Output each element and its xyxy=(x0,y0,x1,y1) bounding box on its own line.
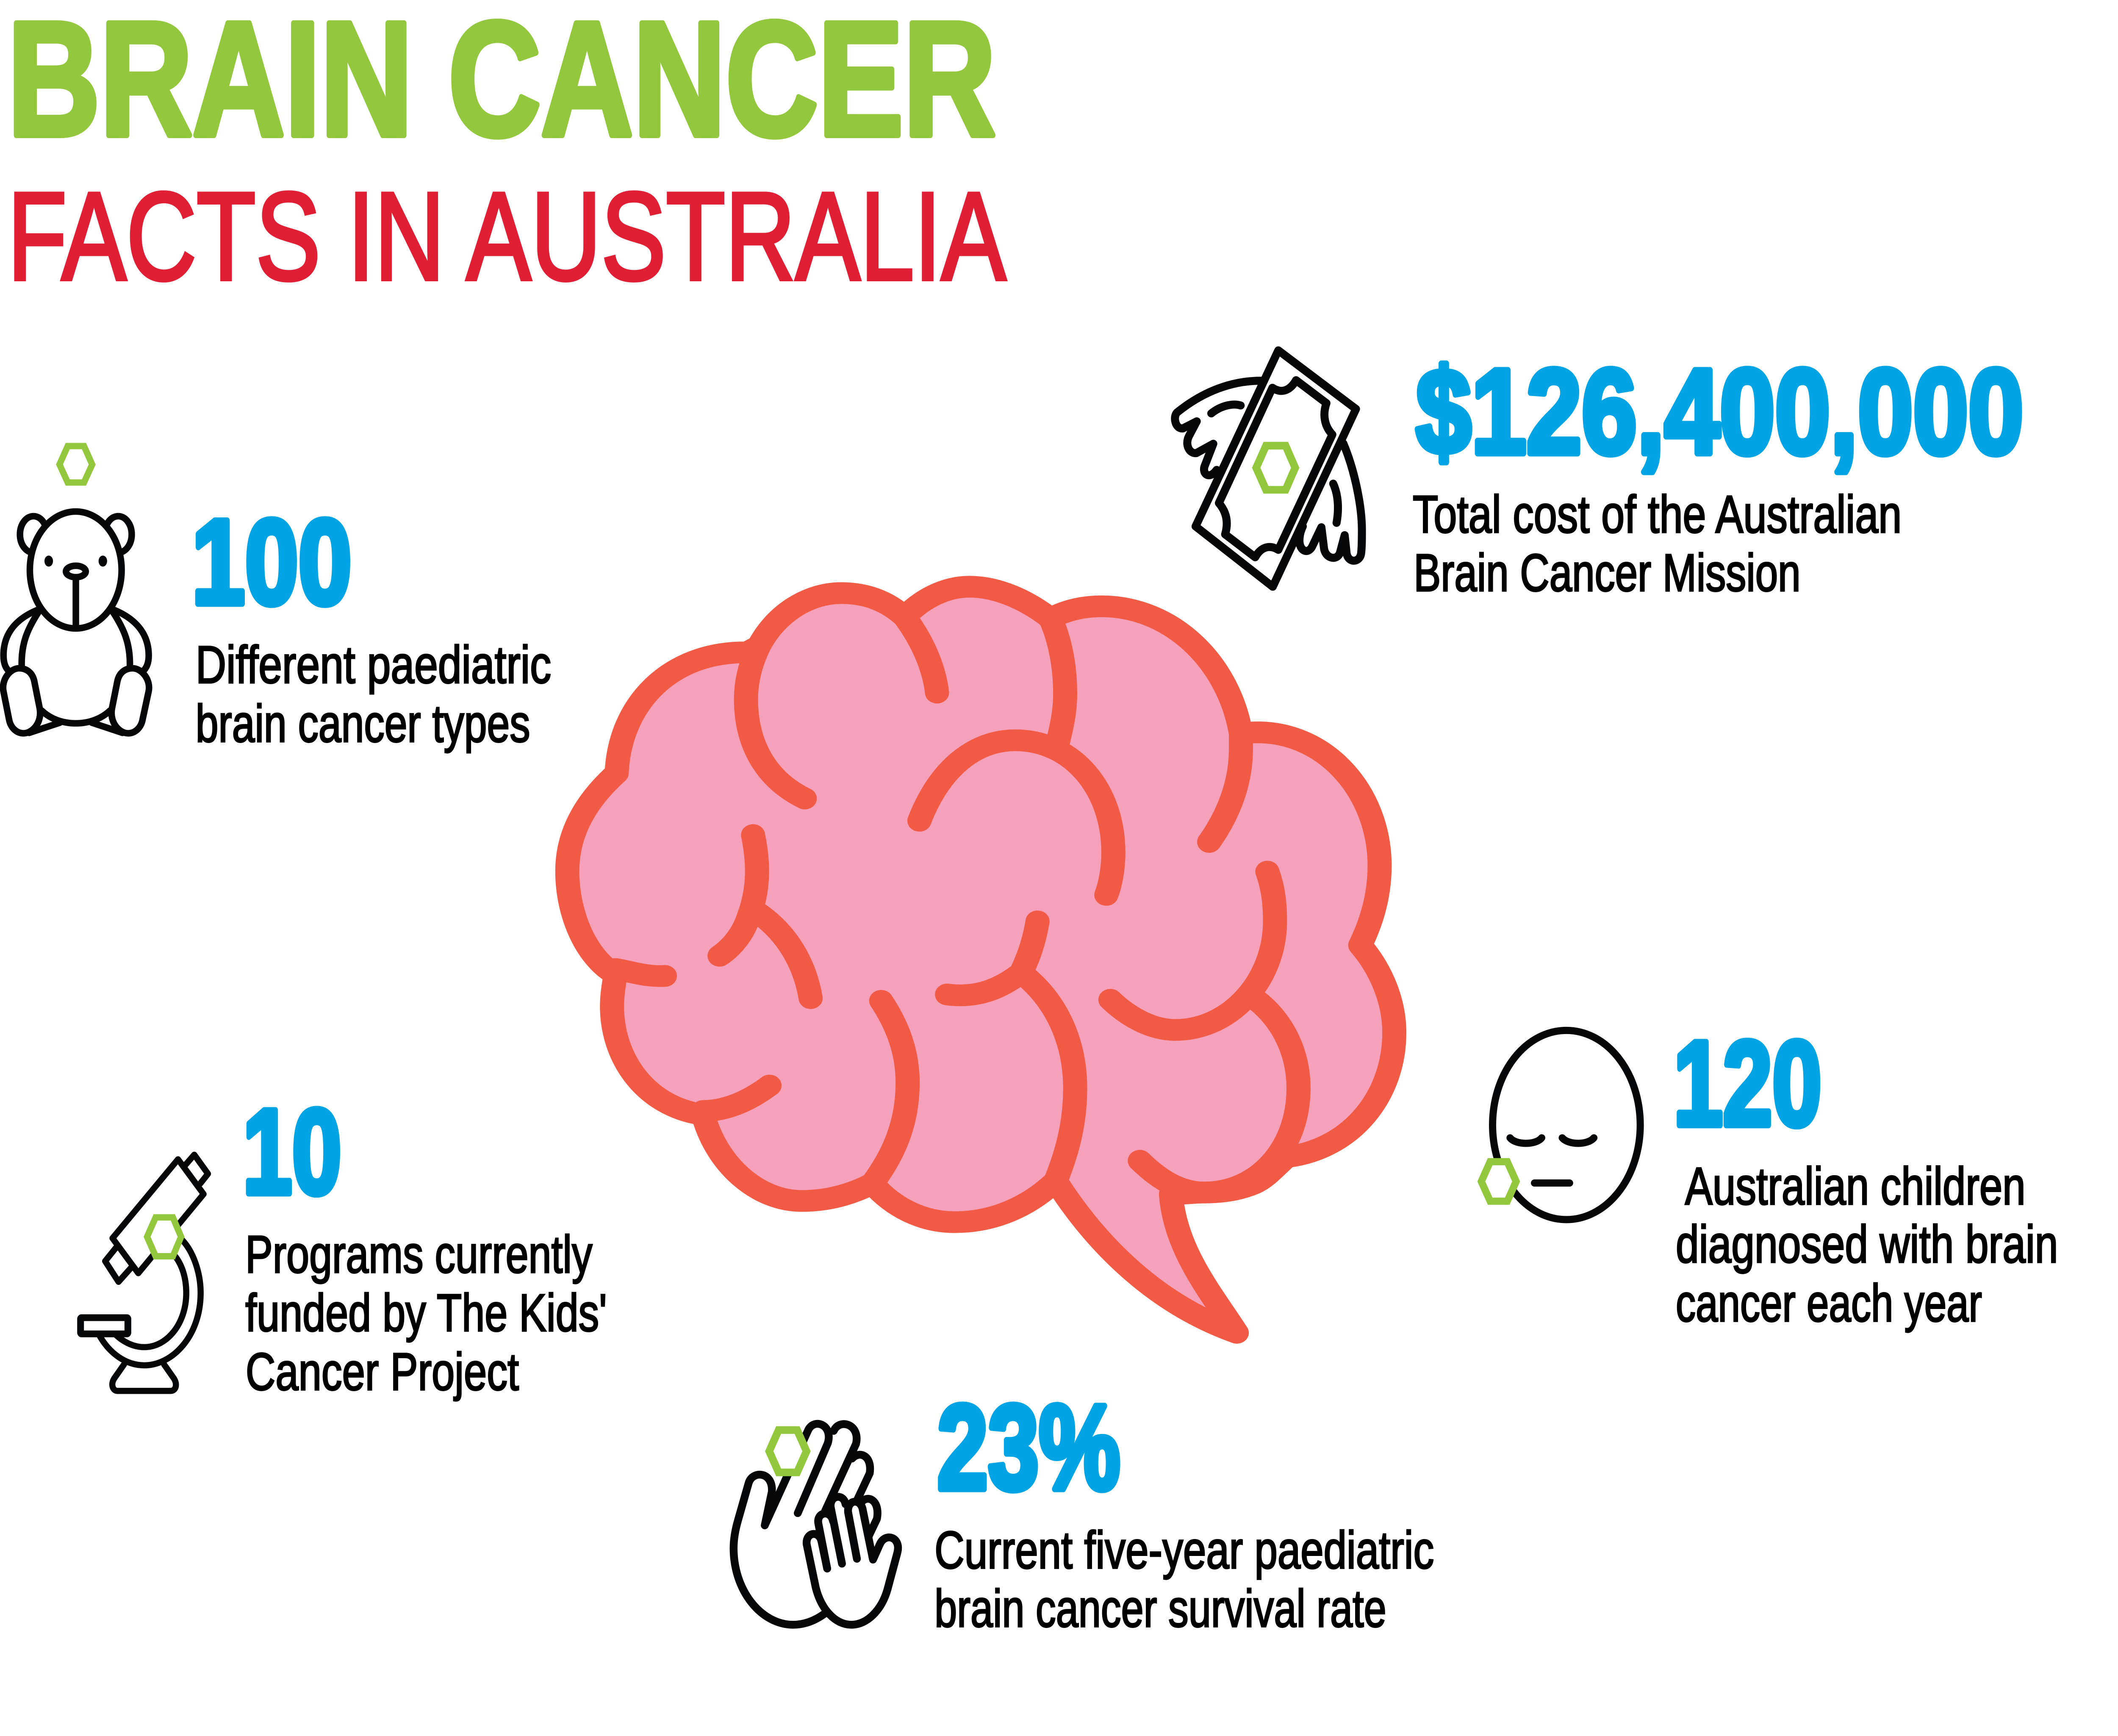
description: funded programs xyxy=(245,1225,607,1401)
icon: sad face xyxy=(1481,1030,1640,1220)
icon: brain with speech bubble tail xyxy=(567,587,1394,1333)
panel: mission cost xyxy=(1175,344,2024,602)
icon: teddy bear xyxy=(3,446,149,733)
description: paediatric types: Different paediatric xyxy=(196,635,551,694)
icon: money with wings xyxy=(1175,350,1362,587)
description: children diagnosed xyxy=(1676,1157,2058,1333)
panel: survival rate xyxy=(734,1380,1434,1638)
panel: paediatric cancer types xyxy=(3,446,551,753)
number: 100: 100 xyxy=(191,495,352,630)
description: funded programs: funded by The Kids' xyxy=(245,1284,607,1342)
number: 10: 10 xyxy=(243,1084,341,1219)
description: mission cost xyxy=(1413,485,1902,602)
number: total cost: $126,400,000 xyxy=(1416,344,2024,479)
description: paediatric types: brain cancer types xyxy=(196,694,530,753)
description: survival rate: Current five-year paediatric xyxy=(934,1521,1434,1580)
description: funded programs: Programs currently xyxy=(245,1225,593,1284)
icon: adult and child hands xyxy=(734,1424,898,1625)
description: paediatric types xyxy=(196,635,551,753)
description: survival rate: brain cancer survival rate xyxy=(934,1579,1386,1638)
description: mission cost: Total cost of the Australian xyxy=(1413,485,1902,544)
description: children diagnosed: diagnosed with brain xyxy=(1676,1215,2058,1274)
number: 120: 120 xyxy=(1674,1016,1821,1151)
icon: microscope xyxy=(80,1155,208,1391)
description: mission cost: Brain Cancer Mission xyxy=(1414,544,1801,602)
description: survival rate xyxy=(934,1521,1434,1638)
description: children diagnosed: Australian children xyxy=(1685,1157,2026,1216)
panel: children diagnosed xyxy=(1481,1016,2058,1333)
description: funded programs: Cancer Project xyxy=(246,1342,519,1401)
description: children diagnosed: cancer each year xyxy=(1676,1274,1982,1333)
panel: funded programs xyxy=(80,1084,607,1401)
subtitle: facts in Australia: FACTS IN AUSTRALIA xyxy=(8,166,1006,306)
number: 23%: 23% xyxy=(937,1380,1120,1515)
